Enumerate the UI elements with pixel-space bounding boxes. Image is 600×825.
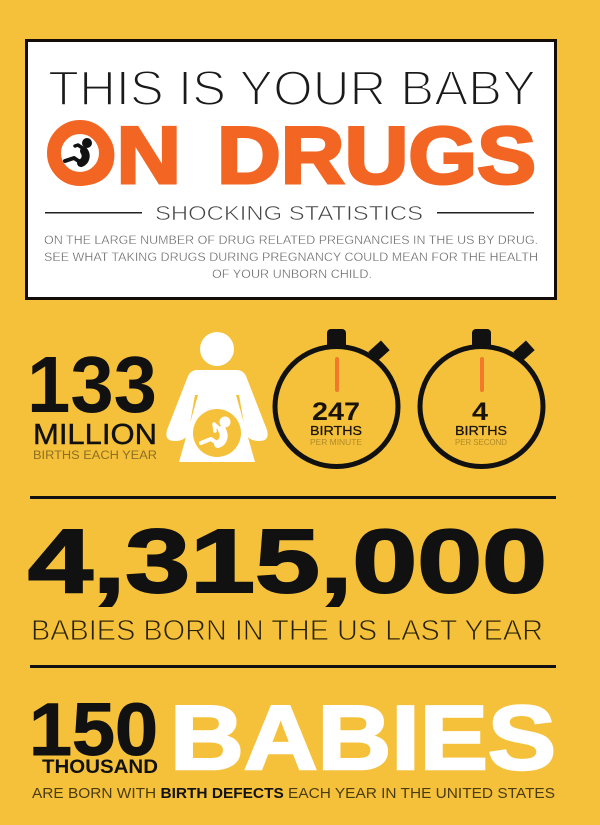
intro paragraph xyxy=(44,235,538,281)
stat: 150 thousand: 150 xyxy=(29,688,158,771)
stat: 150 thousand: THOUSAND xyxy=(42,757,158,778)
caption: babies born in the us last year: BABIES BORN IN THE US LAST YEAR xyxy=(31,615,543,647)
stopwatch: 4 births per second: PER SECOND xyxy=(455,437,507,447)
subheading: shocking statistics: SHOCKING STATISTICS xyxy=(155,203,423,225)
divider line left xyxy=(45,212,142,214)
stopwatch: 247 births per minute: 247 xyxy=(312,398,360,426)
stat: 133 million births each year: 133 xyxy=(27,340,157,429)
heading: on drugs: DRUGS xyxy=(217,111,536,201)
caption: born with birth defects: ARE BORN WITH BIRTH DEFECTS EACH YEAR IN THE UNITED STATES xyxy=(32,786,555,802)
stat: 133 million births each year: BIRTHS EACH YEAR xyxy=(33,450,157,462)
stopwatch: 247 births per minute xyxy=(275,329,398,466)
icon: baby inside letter O xyxy=(54,127,106,179)
stopwatch: 4 births per second: BIRTHS xyxy=(455,423,507,438)
panel: title box xyxy=(26,40,556,298)
stopwatch: 4 births per second: 4 xyxy=(472,398,488,426)
intro paragraph: SEE WHAT TAKING DRUGS DURING PREGNANCY COULD MEAN FOR THE HEALTH xyxy=(44,252,538,264)
stat: 133 million births each year: MILLION xyxy=(33,419,157,451)
heading: on drugs xyxy=(47,111,536,201)
intro paragraph: OF YOUR UNBORN CHILD. xyxy=(212,269,372,281)
stopwatch: 4 births per second xyxy=(420,329,543,466)
stopwatch: 247 births per minute: PER MINUTE xyxy=(310,437,362,447)
heading: babies: BABIES xyxy=(170,688,556,789)
intro paragraph: ON THE LARGE NUMBER OF DRUG RELATED PREGNANCIES IN THE US BY DRUG. xyxy=(44,235,538,247)
stat: 4,315,000 babies: 4,315,000 xyxy=(28,512,547,612)
stopwatch: 247 births per minute: BIRTHS xyxy=(310,423,362,438)
divider line right xyxy=(437,212,534,214)
heading: this is your baby: THIS IS YOUR BABY xyxy=(48,62,536,116)
icon: pregnant woman xyxy=(166,332,268,462)
heading: on drugs: ON xyxy=(47,111,181,201)
